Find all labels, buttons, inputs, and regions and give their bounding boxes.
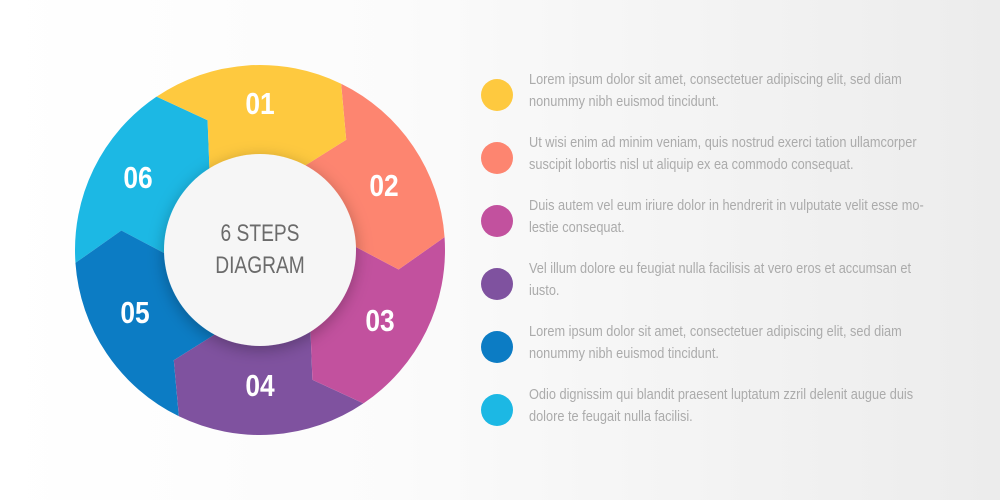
list item 2: suscipit lobortis nisl ut aliquip ex ea commodo consequat. bbox=[529, 156, 854, 173]
text: Odio dignissim qui blandit praesent luptatum zzril delenit augue duis bbox=[529, 386, 913, 403]
segment 04 bbox=[174, 325, 363, 435]
step numbers bbox=[120, 87, 399, 404]
list item 3 bbox=[481, 197, 924, 237]
text: Duis autem vel eum iriure dolor in hendrerit in vulputate velit esse mo- bbox=[529, 197, 924, 214]
list item 6 bbox=[481, 386, 913, 426]
segment 02 bbox=[273, 68, 463, 287]
list item 5 bbox=[481, 323, 902, 363]
list item 5: nonummy nibh euismod tincidunt. bbox=[529, 345, 719, 362]
center circle: 6 STEPS bbox=[221, 219, 299, 247]
step numbers: 02 bbox=[369, 169, 399, 204]
step numbers: 06 bbox=[123, 161, 153, 196]
text: Lorem ipsum dolor sit amet, consectetuer adipiscing elit, sed diam bbox=[529, 71, 902, 88]
center circle bbox=[164, 154, 356, 346]
segment 03 bbox=[282, 198, 472, 417]
step numbers: 04 bbox=[245, 369, 275, 404]
list item 3: lestie consequat. bbox=[529, 219, 625, 236]
list item 4 bbox=[481, 260, 911, 300]
center circle: DIAGRAM bbox=[215, 251, 305, 279]
segment 06 bbox=[48, 83, 238, 302]
step numbers: 05 bbox=[120, 296, 150, 331]
step numbers: 01 bbox=[245, 87, 275, 122]
circular diagram bbox=[75, 65, 445, 435]
text: Ut wisi enim ad minim veniam, quis nostrud exerci tation ullamcorper bbox=[529, 134, 917, 151]
text: Vel illum dolore eu feugiat nulla facilisis at vero eros et accumsan et bbox=[529, 260, 911, 277]
list item 1 bbox=[481, 71, 902, 111]
list item 6: dolore te feugait nulla facilisi. bbox=[529, 408, 693, 425]
list item 1: nonummy nibh euismod tincidunt. bbox=[529, 93, 719, 110]
step numbers: 03 bbox=[365, 304, 395, 339]
list item 2 bbox=[481, 134, 917, 174]
segment 05 bbox=[57, 213, 247, 432]
text: Lorem ipsum dolor sit amet, consectetuer adipiscing elit, sed diam bbox=[529, 323, 902, 340]
segment 01 bbox=[157, 65, 346, 175]
list item 4: iusto. bbox=[529, 282, 559, 299]
